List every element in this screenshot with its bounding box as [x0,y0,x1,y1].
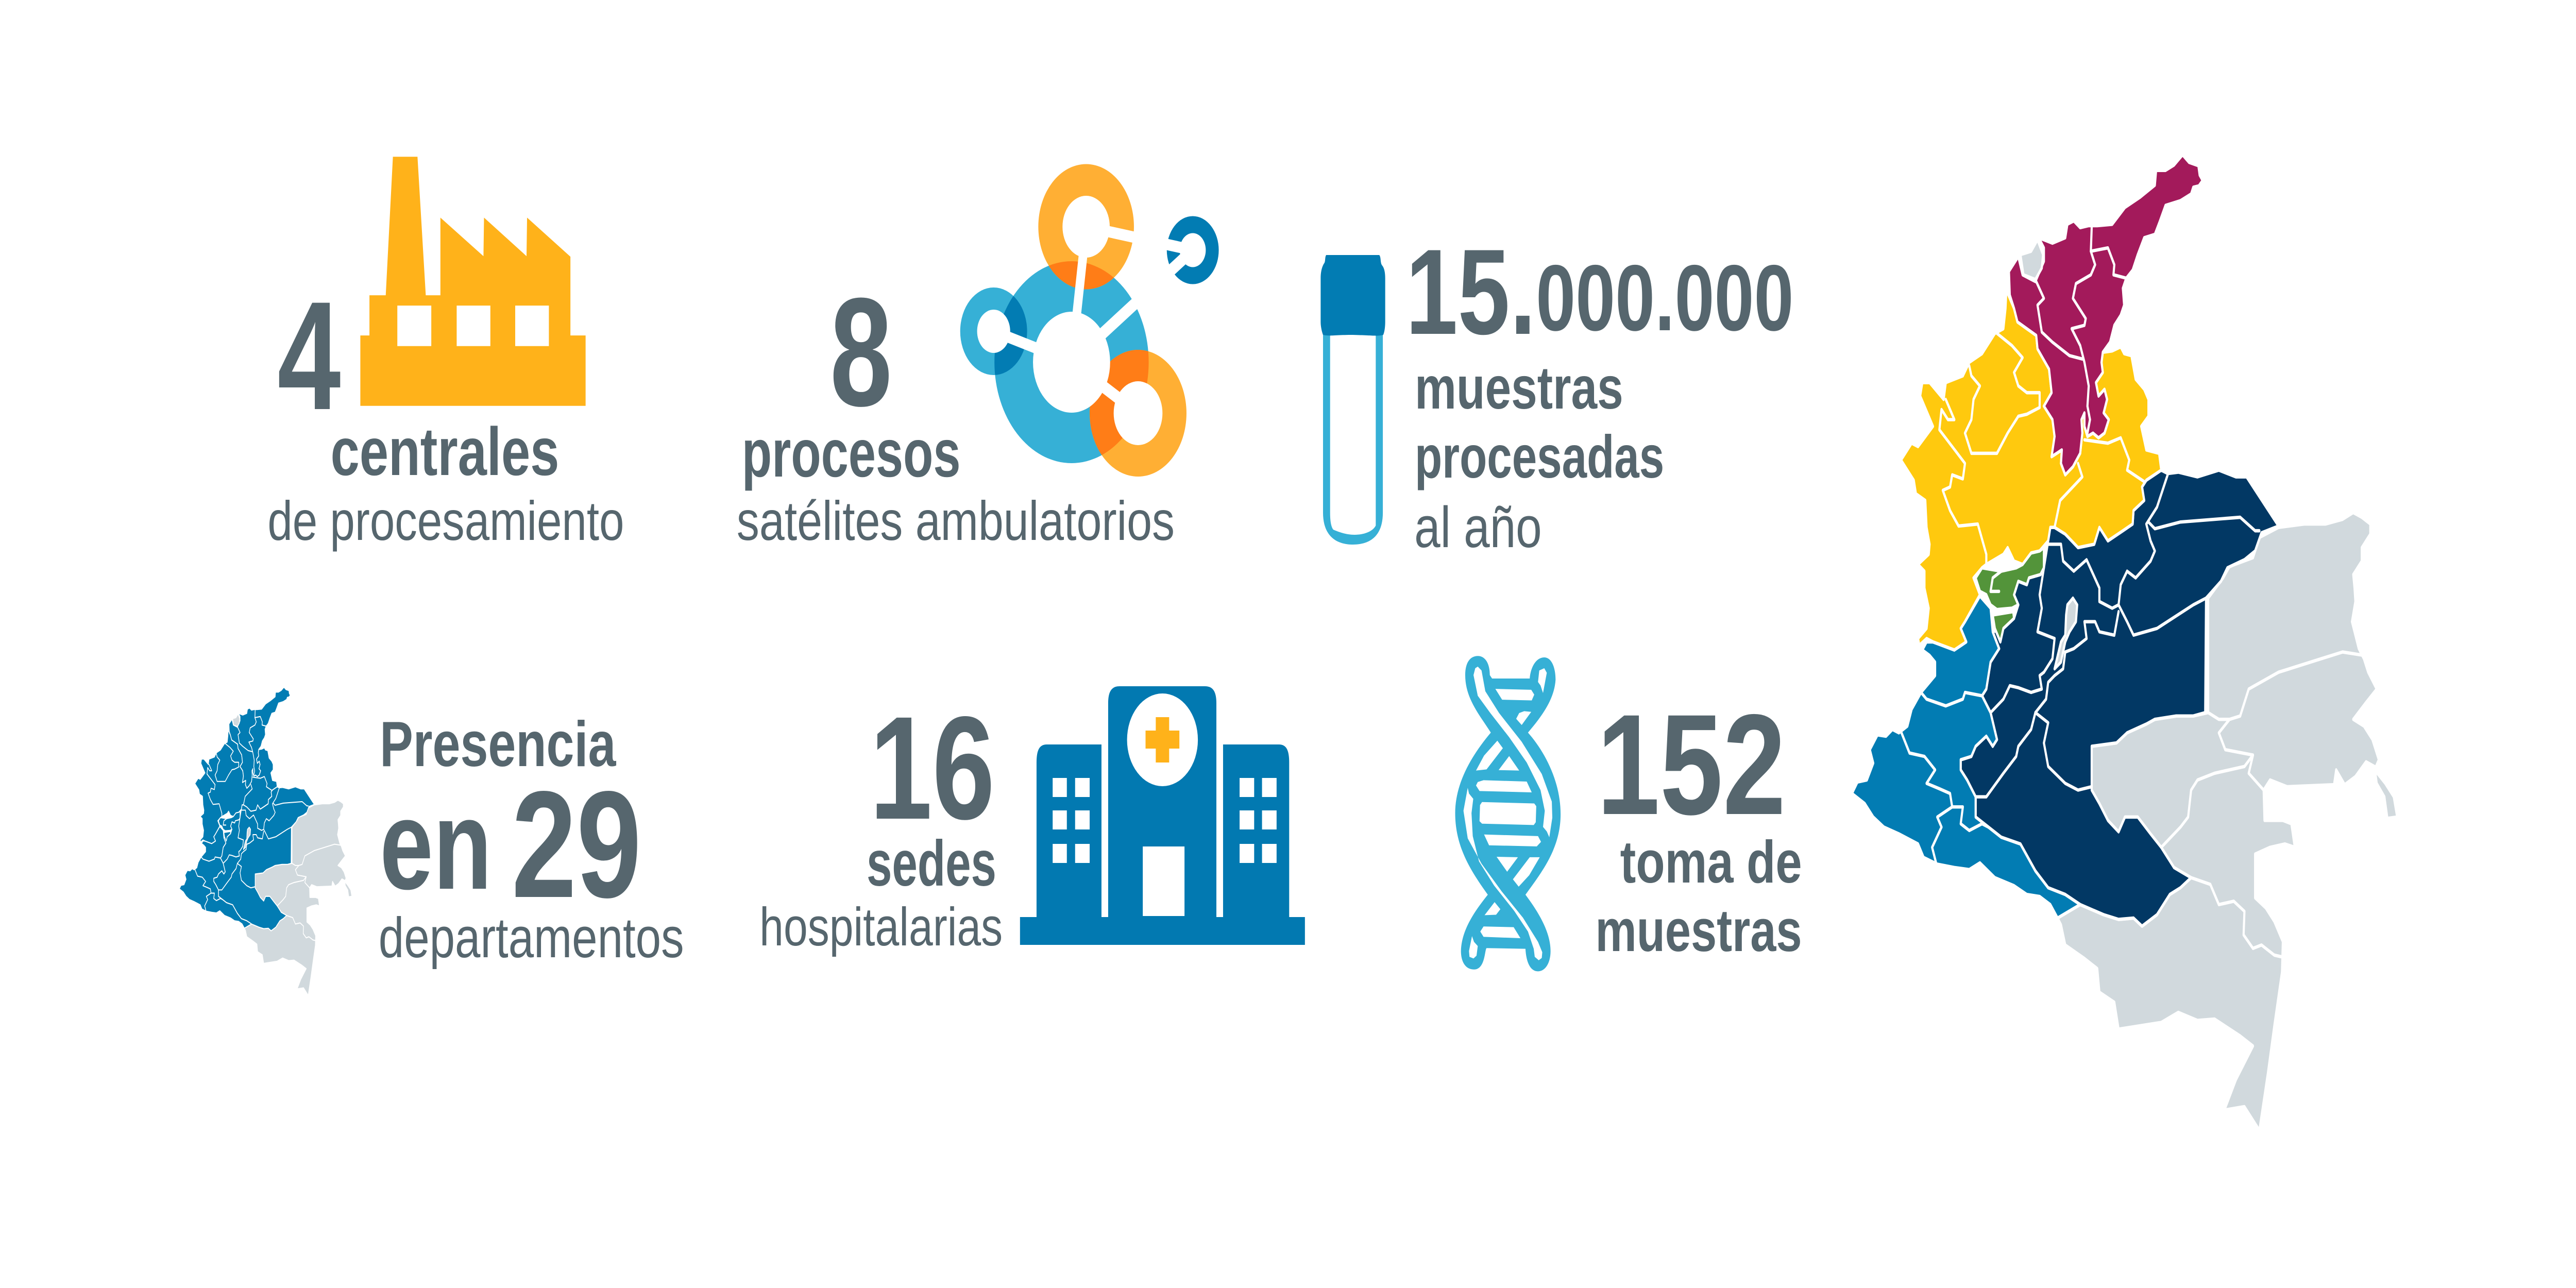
number: 29: 29 [512,759,641,929]
text: hospitalarias: hospitalarias [759,896,1003,957]
panel: procesos satélites [737,164,1219,552]
number: 16: 16 [870,686,995,850]
number: 4: 4 [277,269,342,442]
panel: sedes hospitalarias [759,686,1305,957]
panel: muestras procesadas [1320,225,1794,560]
text: satélites ambulatorios: satélites ambulatorios [737,490,1175,552]
icon: DNA helix [1455,656,1561,971]
icon: test tube [1320,255,1385,545]
heading: procesadas: procesadas [1415,423,1664,491]
heading: muestras: muestras [1415,354,1623,422]
icon: factory [360,157,586,406]
heading: toma de: toma de [1620,828,1802,895]
map: Colombia regions [1852,155,2397,1130]
heading: sedes: sedes [867,827,996,900]
heading: centrales: centrales [331,414,559,489]
text: al año: al año [1414,496,1542,560]
number: 8: 8 [830,265,892,438]
number: 000.000 digits: 000.000 [1536,246,1794,350]
panel: presencia en 29 departamentos [179,687,684,995]
heading: muestras: muestras [1596,897,1802,964]
icon: hospital [1020,686,1305,945]
panel: toma de muestras [1455,656,1802,971]
infographic canvas [180,157,2396,1127]
text: de procesamiento: de procesamiento [267,490,624,552]
number: 15.000.000: 15. [1405,225,1536,360]
heading: procesos: procesos [742,415,960,491]
icon: small map of Colombia [179,687,352,995]
icon: molecule rings [960,164,1219,477]
text: departamentos: departamentos [379,906,684,970]
panel: centrales de procesamiento [267,157,624,552]
heading: Presencia: Presencia [380,709,617,780]
heading: en: en [380,773,492,916]
number: 152: 152 [1597,685,1786,845]
